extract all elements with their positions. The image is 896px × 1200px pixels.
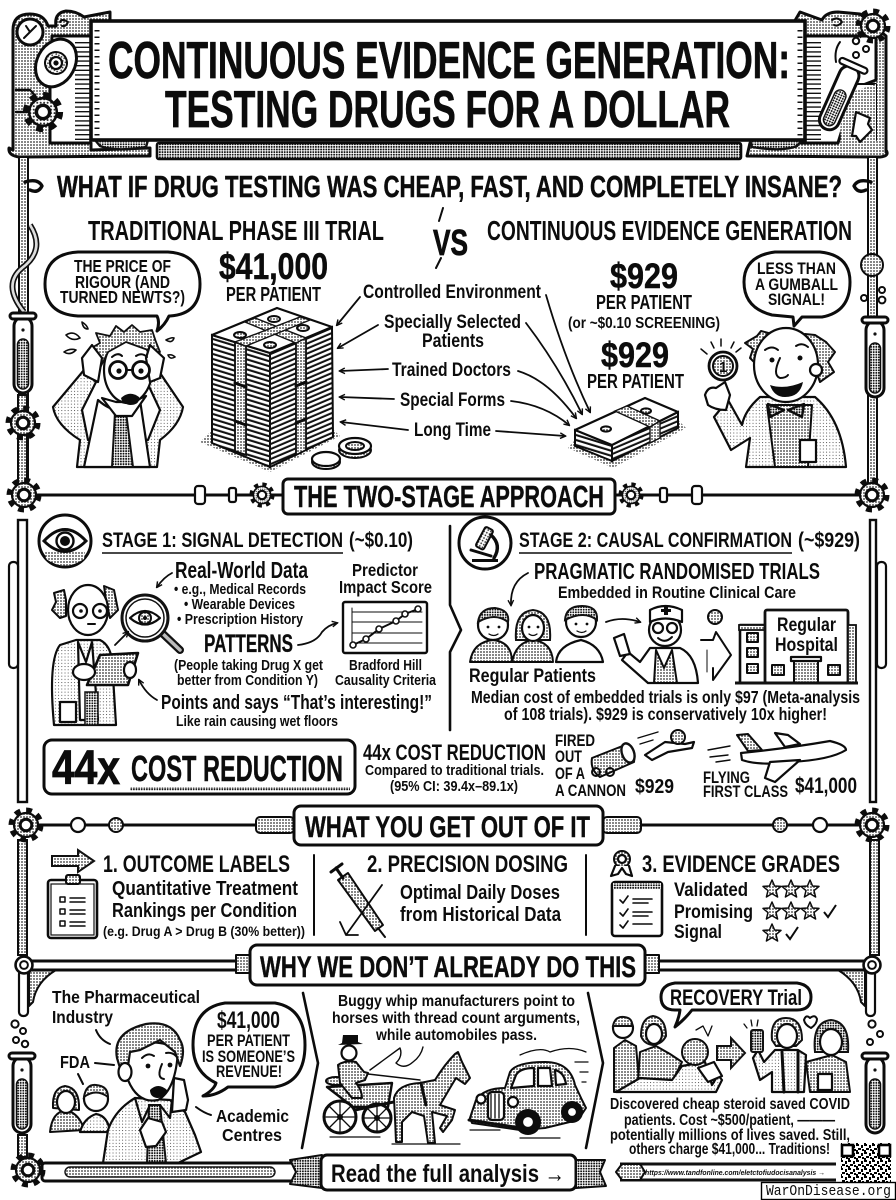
labels: stakeholders: FDA xyxy=(60,1052,90,1072)
illustration: horse and carriage xyxy=(324,1035,470,1144)
versus mark: VS xyxy=(433,222,468,263)
labels with arrows: trial requirements: Controlled Environment xyxy=(363,281,541,303)
labels with arrows: trial requirements: Specially Selected xyxy=(384,311,521,333)
character: happy scientist with coin xyxy=(701,328,846,467)
text: 44x details xyxy=(363,740,546,795)
column dividers xyxy=(314,855,586,935)
panel: precision dosing xyxy=(331,851,568,937)
character: small FDA people xyxy=(50,1085,110,1132)
arrow: recovery xyxy=(717,1038,745,1068)
arrows: stage 1 xyxy=(115,573,337,700)
comparison: flying first class: FIRST CLASS xyxy=(703,783,788,801)
heading: stage 2: STAGE 2: CAUSAL CONFIRMATION xyxy=(519,529,792,552)
character: happy scientist with coin: 1 xyxy=(719,359,727,376)
speech bubble: gumball: A GUMBALL xyxy=(755,275,838,294)
speech bubble: revenue: REVENUE! xyxy=(216,1062,282,1081)
chart: predictor impact score: Causality Criteria xyxy=(335,673,437,689)
text: recovery xyxy=(610,1096,850,1158)
text: 44x details: 44x COST REDUCTION xyxy=(363,740,546,765)
illustration: tall money stack xyxy=(200,308,371,472)
illustration: regular hospital: Regular xyxy=(777,614,836,636)
text: buggy whip: while automobiles pass. xyxy=(375,1027,537,1044)
labels with arrows: trial requirements: Trained Doctors xyxy=(392,359,511,381)
panel: outcome labels xyxy=(48,850,305,939)
heading: stage 1: (~$0.10) xyxy=(349,529,413,552)
text: that's interesting: Points and says “That’s interesting!” xyxy=(161,692,432,714)
speech bubble: price of rigour xyxy=(45,252,200,331)
labels with arrows: trial requirements: Long Time xyxy=(414,419,491,441)
speech bubble: gumball xyxy=(744,252,850,326)
icon: eye badge xyxy=(39,515,91,567)
labels with arrows: trial requirements: Special Forms xyxy=(400,389,505,411)
text: buggy whip xyxy=(332,993,580,1044)
illustration: small money stack xyxy=(568,398,686,468)
panel: evidence grades xyxy=(611,851,840,943)
price: 929 per patient: $929 xyxy=(601,336,669,375)
bottom rail right with link xyxy=(576,1160,836,1188)
frame: header ornament xyxy=(9,11,887,159)
text: real-world data xyxy=(174,557,309,628)
bottom rail right with link: https://www.tandfonline.com/eletctofiudocisanalysis → xyxy=(645,1168,825,1177)
character: worried scientist xyxy=(53,322,183,467)
price: 929 per patient xyxy=(587,336,684,393)
text: 44x details: (95% CI: 39.4x–89.1x) xyxy=(390,779,518,795)
divider: stages xyxy=(450,526,461,730)
divider: why we don't ribbon xyxy=(16,945,880,985)
heading: stage 2: (~$929) xyxy=(798,529,860,552)
comparison: flying first class xyxy=(703,733,857,801)
labels: stakeholders: Academic xyxy=(216,1106,289,1126)
panel: outcome labels: Quantitative Treatment xyxy=(112,878,298,900)
speech bubble: revenue: $41,000 xyxy=(217,1007,280,1034)
icon: magnifying glass with eye xyxy=(122,595,180,650)
speech bubble: revenue: IS SOMEONE’S xyxy=(202,1047,295,1066)
labels with arrows: trial requirements xyxy=(337,281,590,441)
text: pragmatic trials: Embedded in Routine Clinical Care xyxy=(558,584,796,602)
comparison: fired out of a cannon xyxy=(555,730,694,800)
icon: microscope badge xyxy=(459,517,511,569)
chart: predictor impact score: Impact Score xyxy=(339,577,432,597)
divider: two-stage ribbon: THE TWO-STAGE APPROACH xyxy=(294,479,604,514)
text: buggy whip: Buggy whip manufacturers point to xyxy=(338,993,575,1010)
price: 929 per patient with screening xyxy=(568,257,720,332)
price: 41000 per patient: $41,000 xyxy=(219,246,328,287)
divider: what you get ribbon: WHAT YOU GET OUT OF IT xyxy=(305,811,590,844)
character: scientist with tablet xyxy=(52,585,138,725)
text: real-world data: Real-World Data xyxy=(175,557,309,583)
panel: outcome labels: Rankings per Condition xyxy=(112,900,297,922)
comparison: flying first class: $41,000 xyxy=(795,773,857,798)
comparison: fired out of a cannon: $929 xyxy=(635,776,674,798)
speech bubble: recovery trial xyxy=(661,983,811,1027)
labels: stakeholders: Centres xyxy=(222,1125,282,1145)
divider: two-stage ribbon xyxy=(10,479,886,514)
price: 929 per patient with screening: (or ~$0.10 SCREENING) xyxy=(568,315,720,332)
character: worried man xyxy=(103,1023,201,1163)
labels: stakeholders xyxy=(52,987,289,1145)
speech bubble: price of rigour: RIGOUR (AND xyxy=(75,272,170,292)
character: doctor xyxy=(614,606,698,683)
callout: 44x cost reduction xyxy=(44,740,355,795)
icon: clock and chevron xyxy=(701,610,731,680)
heading: stage 1: STAGE 1: SIGNAL DETECTION xyxy=(102,529,343,552)
illustration: vintage car xyxy=(469,1048,588,1138)
text: buggy whip: horses with thread count arguments, xyxy=(332,1010,580,1027)
speech bubble: price of rigour: TURNED NEWTS?) xyxy=(60,287,185,307)
text: real-world data: • Wearable Devices xyxy=(184,596,295,613)
comparison: fired out of a cannon: A CANNON xyxy=(555,782,626,800)
panel: precision dosing: 2. PRECISION DOSING xyxy=(367,851,568,878)
speech bubble: revenue: PER PATIENT xyxy=(207,1031,290,1050)
text: patterns: (People taking Drug X get xyxy=(174,657,323,674)
illustration: regular patients xyxy=(469,606,640,687)
panel: evidence grades: 3. EVIDENCE GRADES xyxy=(642,851,840,878)
versus mark xyxy=(433,208,468,268)
chart: predictor impact score xyxy=(335,560,437,689)
labels: stakeholders: Industry xyxy=(52,1007,113,1027)
price: 41000 per patient xyxy=(219,246,328,306)
illustration: regular patients: Regular Patients xyxy=(469,665,596,687)
icon: test tube with bubbles xyxy=(812,38,876,145)
chevron dividers xyxy=(302,993,603,1148)
speech bubble: price of rigour: THE PRICE OF xyxy=(74,256,171,276)
text: real-world data: • Prescription History xyxy=(177,611,304,628)
panel: outcome labels: (e.g. Drug A > Drug B (30% better)) xyxy=(103,923,305,939)
divider: what you get ribbon xyxy=(12,806,886,845)
speech bubble: revenue xyxy=(193,1003,305,1096)
comparison: fired out of a cannon: FIRED xyxy=(555,732,595,750)
panel: outcome labels: 1. OUTCOME LABELS xyxy=(103,851,290,878)
icon: side test tubes xyxy=(9,313,888,1133)
text: patterns: better from Condition Y) xyxy=(177,672,318,689)
text: median cost: of 108 trials). $929 is conservatively 10x higher! xyxy=(504,704,827,724)
text: patterns: PATTERNS xyxy=(204,630,293,658)
comparison: fired out of a cannon: OUT xyxy=(555,748,582,766)
labels: stakeholders: The Pharmaceutical xyxy=(52,987,200,1007)
panel: evidence grades: Promising xyxy=(674,901,753,923)
panel: evidence grades: Validated xyxy=(674,879,748,901)
text: pragmatic trials xyxy=(511,558,820,605)
panel: precision dosing: from Historical Data xyxy=(400,904,562,926)
callout: 44x cost reduction: 44x xyxy=(52,742,120,795)
text: real-world data: • e.g., Medical Records xyxy=(174,581,306,598)
call to action: Read the full analysis → xyxy=(331,1160,565,1188)
call to action xyxy=(321,1155,576,1190)
qr code xyxy=(841,1143,891,1183)
price: 929 per patient with screening: $929 xyxy=(610,257,678,296)
divider: why we don't ribbon: WHY WE DON’T ALREADY DO THIS xyxy=(260,951,636,984)
text: recovery: others charge $41,000... Traditions! xyxy=(629,1141,830,1158)
panel: evidence grades: Signal xyxy=(674,921,722,943)
illustration: regular hospital xyxy=(735,610,858,683)
illustration: regular hospital: Hospital xyxy=(775,634,838,656)
text: patterns xyxy=(174,630,323,689)
comparison: flying first class: FLYING xyxy=(703,769,750,787)
text: recovery: patients. Cost ~$500/patient, ——— xyxy=(624,1112,835,1129)
text: median cost xyxy=(471,687,860,724)
panel: precision dosing: Optimal Daily Doses xyxy=(400,882,560,904)
price: 41000 per patient: PER PATIENT xyxy=(226,284,321,306)
speech bubble: gumball: SIGNAL! xyxy=(768,290,825,309)
title banner xyxy=(91,21,805,140)
illustration: happy recovered people xyxy=(744,1016,850,1092)
column heading: traditional: TRADITIONAL PHASE III TRIAL xyxy=(88,215,384,246)
comparison: fired out of a cannon: OF A xyxy=(555,765,585,783)
chart: predictor impact score: Predictor xyxy=(352,560,418,580)
bottom rail left xyxy=(14,1155,322,1188)
speech bubble: gumball: LESS THAN xyxy=(757,259,836,278)
illustration: hospital patient group xyxy=(613,1016,722,1092)
labels with arrows: trial requirements: Patients xyxy=(422,330,484,352)
speech bubble: recovery trial: RECOVERY Trial xyxy=(670,985,802,1010)
text: 44x details: Compared to traditional trials. xyxy=(365,763,544,779)
callout: 44x cost reduction: COST REDUCTION xyxy=(131,748,343,789)
price: 929 per patient with screening: PER PATIENT xyxy=(596,292,692,314)
icon: eye specimen xyxy=(27,32,85,94)
price: 929 per patient: PER PATIENT xyxy=(587,371,684,393)
text: that's interesting xyxy=(161,692,432,730)
text: that's interesting: Like rain causing wet floors xyxy=(176,713,338,730)
chart: predictor impact score: Bradford Hill xyxy=(349,658,422,674)
